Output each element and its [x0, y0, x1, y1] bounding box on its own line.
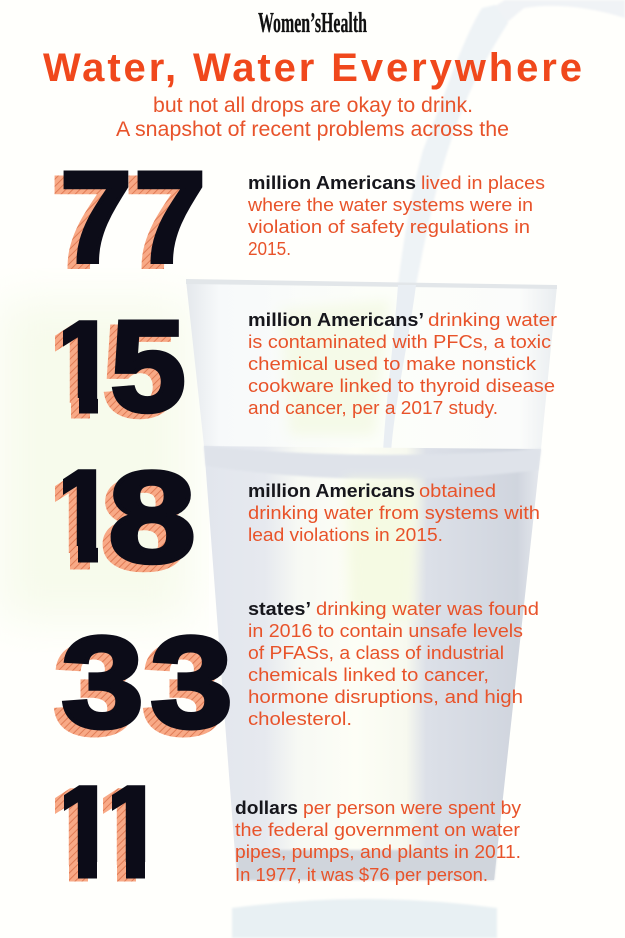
description 18 [248, 481, 540, 545]
number 77: 7 [60, 144, 132, 290]
number 11: 1 [38, 761, 113, 910]
empty upper glass [186, 280, 557, 449]
subtitle: but not all drops are okay to drink. [153, 94, 473, 117]
description 15 [248, 310, 557, 418]
stat: 18 [55, 469, 539, 572]
number 33 [53, 609, 233, 762]
number 15 [55, 320, 184, 420]
description 15: cookware linked to thyroid disease [248, 376, 555, 396]
number 18: 8 [108, 444, 196, 590]
number 11 [55, 785, 146, 882]
subtitle [116, 94, 509, 141]
number 77: 7 [51, 149, 123, 295]
description 15: chemical used to make nonstick [248, 354, 537, 374]
description 18: drinking water from systems with [248, 503, 540, 523]
description 33: of PFASs, a class of industrial [248, 643, 504, 663]
number 15: 1 [39, 298, 114, 447]
logo: Women's Health: Women’sHealth [258, 7, 367, 39]
description 18: obtained [419, 481, 496, 501]
stat: 77 [51, 144, 545, 295]
description 33 [248, 599, 539, 729]
number 15: 5 [102, 298, 178, 444]
description 11: the federal government on water [235, 820, 520, 840]
stat: 15 [55, 312, 557, 420]
number 77: 7 [125, 149, 197, 295]
description 77: lived in places [421, 173, 545, 193]
number 11: 1 [47, 758, 122, 907]
description 15: is contaminated with PFCs, a toxic [248, 332, 551, 352]
number 15: 1 [47, 293, 122, 442]
description 77: million Americans [248, 173, 416, 193]
description 33: drinking water was found [316, 599, 539, 619]
description 77: where the water systems were in [247, 195, 533, 215]
description 11: pipes, pumps, and plants in 2011. [235, 842, 521, 862]
description 18: million Americans [248, 481, 415, 501]
number 77: 7 [134, 144, 206, 290]
description 18: lead violations in 2015. [248, 525, 443, 545]
stat: 11 [55, 785, 521, 885]
description 15: million Americans’ [248, 310, 424, 330]
number 33: 3 [53, 616, 136, 762]
description 15: drinking water [428, 310, 557, 330]
description 77: 2015. [248, 239, 291, 259]
description 33: hormone disruptions, and high [248, 687, 523, 707]
stat: 33 [53, 599, 539, 762]
number 11: 1 [95, 758, 170, 907]
water body [204, 446, 541, 880]
number 33: 3 [142, 616, 225, 762]
number 33: 3 [61, 609, 144, 755]
description 33: cholesterol. [248, 709, 352, 729]
description 77: violation of safety regulations in [248, 217, 530, 237]
description 33: in 2016 to contain unsafe levels [248, 621, 523, 641]
water stream [398, 0, 625, 285]
description 77 [247, 173, 545, 259]
description 33: states’ [248, 599, 311, 619]
number 18: 1 [38, 449, 113, 598]
description 11: dollars [235, 798, 298, 818]
description 11: per person were spent by [303, 798, 521, 818]
number 18: 1 [46, 442, 121, 591]
number 15: 5 [110, 293, 186, 439]
subtitle: A snapshot of recent problems across the [116, 118, 509, 141]
description 11: In 1977, it was $76 per person. [235, 865, 488, 885]
number 11: 1 [86, 761, 161, 910]
description 11 [235, 798, 521, 885]
number 18: 8 [100, 451, 188, 597]
description 33: chemicals linked to cancer, [248, 665, 489, 685]
title: Water, Water Everywhere [43, 46, 582, 90]
glass base [232, 899, 497, 938]
number 18 [55, 469, 194, 572]
number 33: 3 [150, 609, 233, 755]
number 77 [51, 144, 206, 295]
description 15: and cancer, per a 2017 study. [248, 398, 498, 418]
